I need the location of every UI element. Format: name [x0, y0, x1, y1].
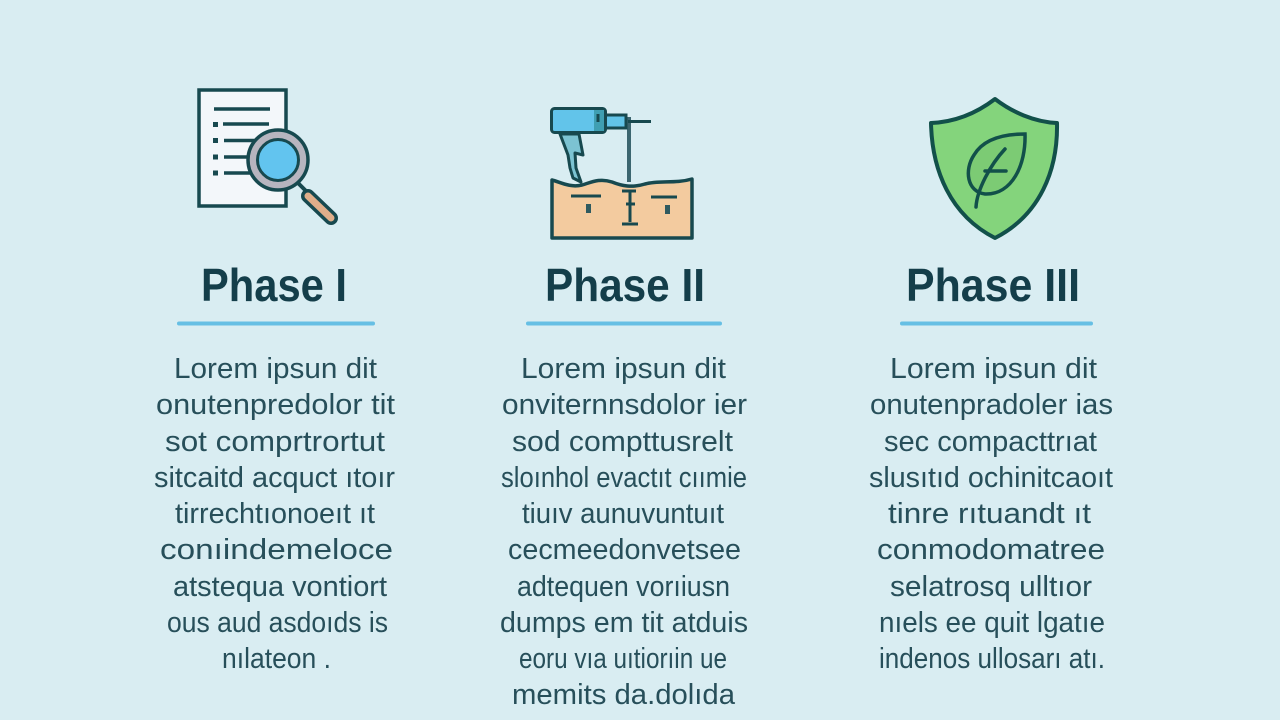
text block: phase III description	[869, 353, 1113, 675]
text block: phase II description: sod compttusrelt	[512, 426, 733, 458]
panel: phase III	[869, 99, 1113, 675]
text block: phase III description: nıels ee quit lgatıe	[879, 607, 1105, 639]
icon: shield with leaf	[931, 99, 1057, 238]
text block: phase III description: indenos ullosarı atı.	[879, 643, 1105, 675]
text block: phase III description: Lorem ipsun dit	[890, 353, 1097, 385]
panel: phase II	[500, 108, 748, 711]
text block: phase II description: dumps em tit atduis	[500, 607, 748, 639]
text block: phase III description: sec compacttrıat	[884, 426, 1097, 458]
panel: phase I	[154, 90, 395, 675]
underline	[900, 322, 1093, 326]
icon: drill over ground	[552, 108, 692, 238]
underline	[177, 322, 375, 326]
text block: phase I description	[154, 353, 395, 675]
text block: phase I description: sot comprtrortut	[165, 426, 385, 458]
text block: phase III description: tinre rıtuandt ıt	[888, 498, 1091, 530]
text block: phase II description: tiuıv aunuvuntuıt	[522, 498, 724, 530]
text block: phase II description	[500, 353, 748, 711]
text block: phase II description: Lorem ipsun dit	[521, 353, 726, 385]
text block: phase I description: nılateon .	[222, 643, 331, 675]
text block: phase I description: ous aud asdoıds is	[167, 607, 388, 639]
text block: phase I description: sitcaitd acquct ıtoır	[154, 462, 395, 494]
text block: phase III description: conmodomatree	[877, 534, 1105, 566]
text block: phase II description: onviternnsdolor ier	[502, 389, 747, 421]
icon: document with magnifying glass	[199, 90, 331, 218]
text block: phase I description: Lorem ipsun dit	[174, 353, 377, 385]
text block: phase I description: conıindemeloce	[160, 534, 393, 566]
text block: phase II description: eoru vıa uıtiorıin ue	[519, 643, 727, 675]
heading: Phase II: Phase II	[545, 259, 705, 311]
text block: phase III description: onutenpradoler ias	[870, 389, 1113, 421]
text block: phase II description: memits da.dolıda	[512, 679, 736, 711]
text block: phase I description: atstequa vontiort	[173, 571, 387, 603]
underline	[526, 322, 722, 326]
heading: Phase I: Phase I	[201, 259, 347, 311]
text block: phase II description: cecmeedonvetsee	[508, 534, 741, 566]
text block: phase II description: adtequen vorıiusn	[517, 571, 730, 603]
text block: phase I description: onutenpredolor tit	[156, 389, 395, 421]
text block: phase III description: slusıtıd ochinitcaoıt	[869, 462, 1113, 494]
text block: phase I description: tirrechtıonoeıt ıt	[175, 498, 375, 530]
heading: Phase III: Phase III	[906, 259, 1080, 311]
text block: phase II description: sloınhol evactıt cıımie	[501, 462, 747, 494]
text block: phase III description: selatrosq ulltıor	[890, 571, 1092, 603]
